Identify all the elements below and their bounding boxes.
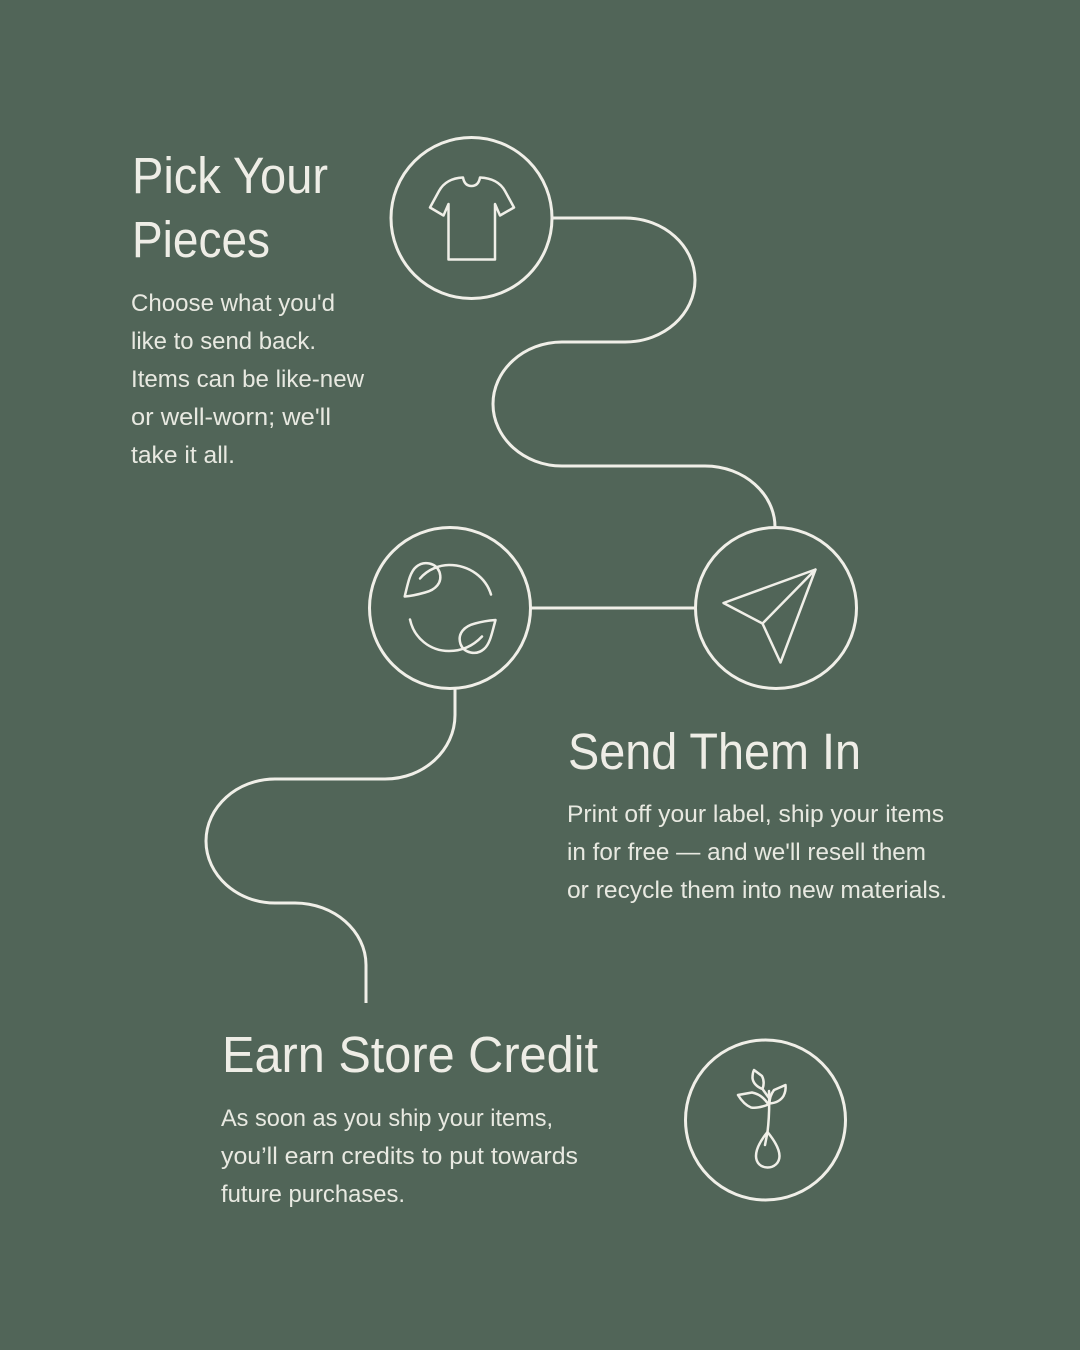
text block: step 2 description: or recycle them into new materials. xyxy=(567,877,947,904)
text block: step 1 description: or well-worn; we'll xyxy=(131,404,331,431)
heading: send them in: Send Them In xyxy=(568,723,861,780)
text block: step 3 description xyxy=(221,1105,578,1208)
icon: sprouting seed in circle xyxy=(686,1040,846,1200)
text block: step 1 description: Items can be like-new xyxy=(131,366,364,393)
icon: recycle leaves in circle xyxy=(370,528,530,688)
text block: step 1 description xyxy=(131,290,364,469)
text block: step 3 description: you’ll earn credits to put towards xyxy=(221,1143,578,1170)
text block: step 1 description: like to send back. xyxy=(131,328,316,355)
heading: pick your pieces xyxy=(132,147,328,268)
icon: t-shirt in circle xyxy=(391,138,552,298)
panel: step 3 earn store credit xyxy=(221,1026,598,1208)
heading: earn store credit: Earn Store Credit xyxy=(222,1026,598,1083)
text block: step 1 description: take it all. xyxy=(131,442,235,469)
connector: plane circle to recycle circle xyxy=(531,606,695,610)
connector: recycle circle to earn credit step xyxy=(206,689,455,1003)
icon: paper plane in circle xyxy=(696,528,856,688)
text block: step 2 description xyxy=(567,801,947,904)
heading: pick your pieces: Pieces xyxy=(132,211,270,268)
panel: step 1 pick your pieces xyxy=(131,147,364,469)
panel: step 2 send them in xyxy=(567,723,947,904)
text block: step 3 description: future purchases. xyxy=(221,1181,405,1208)
text block: step 1 description: Choose what you'd xyxy=(131,290,335,317)
heading: pick your pieces: Pick Your xyxy=(132,147,328,204)
text block: step 2 description: in for free — and we'll resell them xyxy=(567,839,926,866)
text block: step 2 description: Print off your label, ship your items xyxy=(567,801,944,828)
text block: step 3 description: As soon as you ship your items, xyxy=(221,1105,553,1132)
connector: shirt circle to plane circle xyxy=(493,218,775,527)
